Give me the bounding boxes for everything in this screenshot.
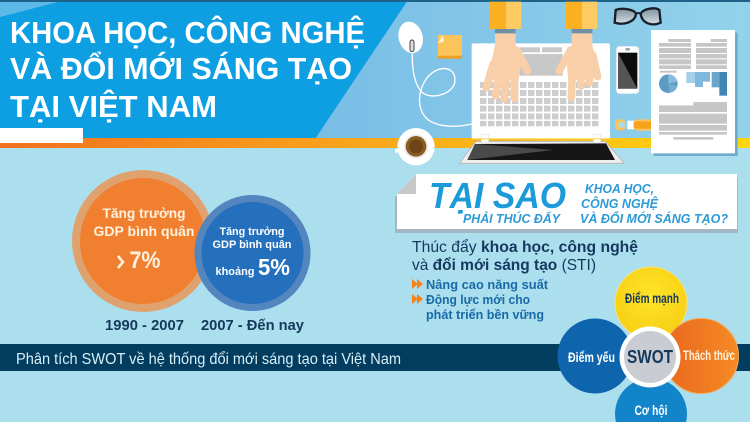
SWOT diagram (558, 267, 738, 422)
icon: report document (651, 30, 738, 156)
title (10, 14, 365, 124)
desk illustration (395, 2, 738, 165)
callout: why banner: TẠI SAO (429, 175, 566, 216)
bullet list: Nâng cao năng suất (426, 277, 549, 292)
circle: 2007-present: khoảng (216, 266, 254, 278)
callout: why banner: KHOA HỌC, (585, 182, 654, 196)
circle: 2007-present (194, 195, 310, 311)
petal: cơ hội (615, 378, 687, 422)
icon: glasses (615, 8, 661, 24)
circle: 2007-present: Tăng trưởng (220, 226, 284, 238)
icon: smartphone (616, 46, 639, 94)
callout: why banner: CÔNG NGHỆ (581, 196, 659, 211)
white tab (0, 128, 83, 143)
callout: why banner: VÀ ĐỔI MỚI SÁNG TẠO? (580, 211, 728, 226)
centre: SWOT (620, 326, 680, 388)
icon: hands and sleeves (486, 2, 598, 99)
title: KHOA HỌC, CÔNG NGHỆ (10, 14, 365, 50)
centre: SWOT: SWOT (627, 347, 673, 367)
icon: coffee cup (395, 128, 435, 165)
circle: 1990-2007: Tăng trưởng (102, 206, 186, 221)
callout: why banner (395, 174, 738, 233)
petal: điểm mạnh: Điểm mạnh (625, 291, 679, 306)
icon: usb drive (615, 119, 655, 131)
petal: thách thức (664, 318, 738, 394)
year labels (105, 318, 304, 334)
year labels: 2007 - Đến nay (201, 318, 304, 334)
GDP growth circles (72, 170, 310, 312)
petal: điểm mạnh (615, 267, 687, 339)
icon: laptop (459, 43, 624, 163)
icon: sticky note (438, 35, 462, 59)
text block: STI (412, 238, 638, 274)
bullet list: phát triển bền vững (426, 307, 544, 322)
year labels: 1990 - 2007 (105, 318, 184, 334)
petal: điểm yếu: Điểm yếu (568, 350, 615, 365)
circle: 1990-2007: 7% (130, 247, 160, 274)
orange stripe (0, 138, 750, 148)
header illustration background (300, 0, 750, 139)
icon: mouse and cable (395, 19, 472, 126)
callout: why banner: PHẢI THÚC ĐẨY (463, 211, 562, 226)
bullet list (412, 277, 549, 322)
circle: 1990-2007 (72, 170, 214, 312)
circle: 2007-present: 5% (258, 254, 290, 280)
header blue banner (0, 0, 408, 139)
petal: cơ hội: Cơ hội (634, 403, 668, 418)
title: VÀ ĐỔI MỚI SÁNG TẠO (10, 50, 352, 86)
SWOT section bar (0, 344, 750, 371)
SWOT section bar: Phân tích SWOT về hệ thống đổi mới sáng tạo tại Việt Nam (16, 350, 401, 368)
bullet list: Động lực mới cho (426, 292, 530, 307)
title: TẠI VIỆT NAM (10, 88, 217, 124)
petal: điểm yếu (558, 318, 632, 394)
circle: 2007-present: GDP bình quân (212, 239, 292, 251)
text block: STI: Thúc đẩy khoa học, công nghệ (412, 238, 638, 256)
text block: STI: và đổi mới sáng tạo (STI) (412, 256, 596, 274)
circle: 1990-2007: GDP bình quân (94, 224, 194, 239)
